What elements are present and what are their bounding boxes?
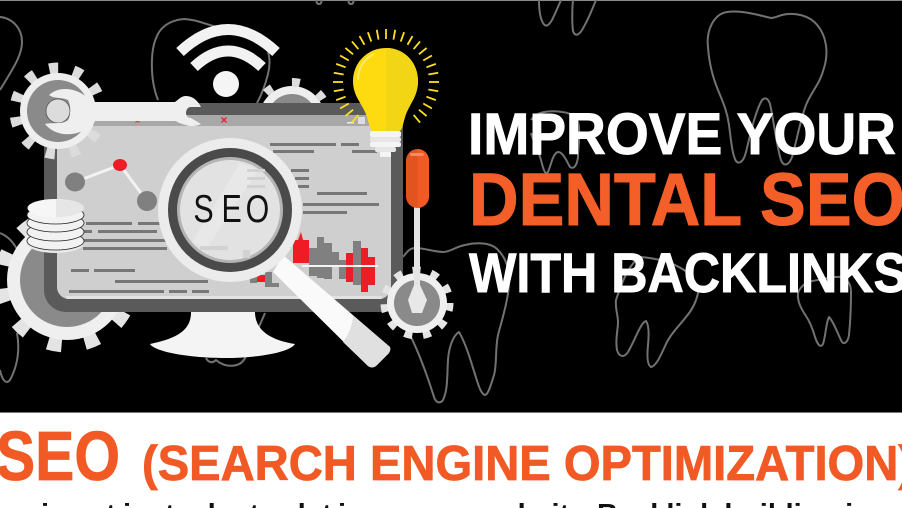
subheading: search engine optimization: SEO bbox=[0, 417, 120, 495]
window controls bbox=[136, 117, 365, 124]
title block bbox=[468, 102, 902, 304]
monitor stand bbox=[150, 310, 295, 358]
icon: top left gear with wrench bbox=[15, 68, 201, 154]
monitor frame bbox=[44, 103, 403, 312]
icon: large gear bottom left bbox=[1, 214, 133, 346]
body text cropped at bottom edge bbox=[41, 499, 869, 508]
lens label: SEO: SEO bbox=[193, 187, 269, 231]
bulb rays bbox=[333, 29, 439, 123]
tooth outlines background pattern bbox=[0, 0, 851, 402]
magnifier handle bbox=[273, 255, 390, 368]
icon: gear behind monitor bbox=[255, 82, 329, 156]
histogram chart bbox=[250, 232, 378, 292]
screen text lines bbox=[69, 143, 379, 293]
illustration: SEO monitor scene bbox=[1, 29, 450, 368]
subheading: search engine optimization bbox=[0, 417, 902, 495]
icon: magnifying glass bbox=[158, 138, 390, 368]
wrench bbox=[45, 89, 201, 134]
icon: screwdriver with gear bbox=[384, 149, 450, 336]
line chart nodes bbox=[65, 159, 157, 211]
icon: database stack bbox=[27, 199, 84, 253]
icon: wifi signal bbox=[180, 30, 276, 97]
icon: light bulb bbox=[333, 29, 439, 157]
monitor screen bbox=[57, 115, 391, 299]
